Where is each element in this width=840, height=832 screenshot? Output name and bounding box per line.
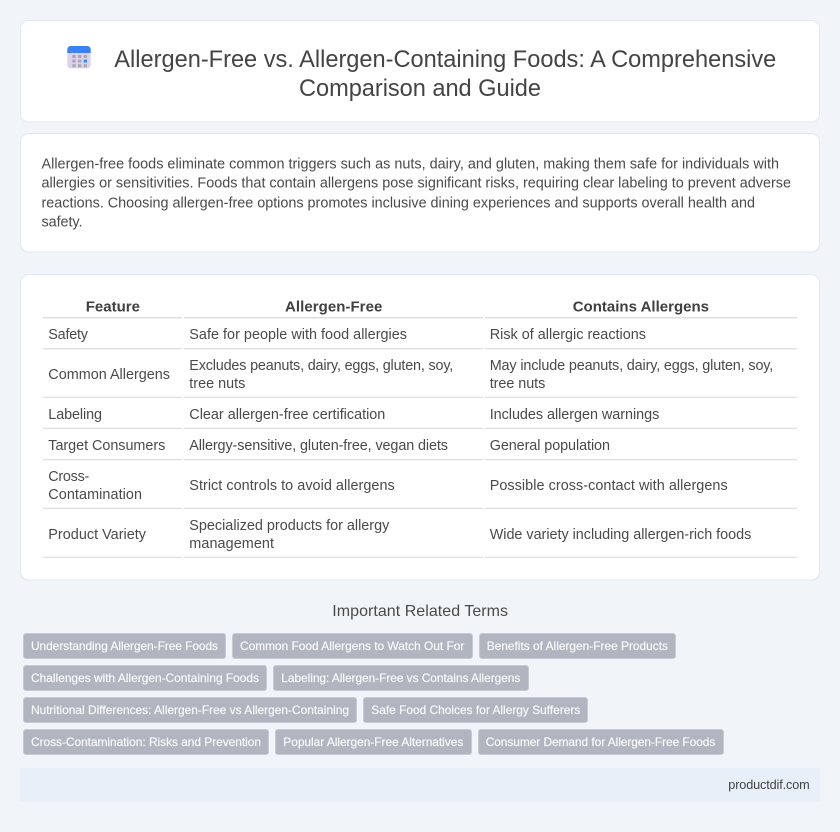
row: labeling [48, 407, 659, 423]
row: product variety: Wide variety including allergen-rich foods [490, 527, 751, 543]
row: safety: Risk of allergic reactions [490, 327, 646, 343]
row: cross-contamination [48, 469, 728, 503]
intro paragraph: Allergen-free foods eliminate common triggers such as nuts, dairy, and gluten, making them safe for individuals with [42, 156, 779, 172]
chip row 4: Cross-Contamination: Risks and Prevention [31, 735, 261, 749]
chip row 1: Understanding Allergen-Free Foods [31, 639, 218, 653]
chip row 3: Safe Food Choices for Allergy Sufferers [371, 703, 580, 717]
chip row 3: Nutritional Differences: Allergen-Free vs Allergen-Containing [31, 703, 349, 717]
row: product variety [48, 518, 751, 552]
chip row 2 [24, 666, 528, 690]
table rules [43, 317, 797, 558]
table header row: Feature [86, 299, 140, 316]
icon: calendar [67, 46, 91, 68]
row: common allergens: tree nuts [189, 376, 245, 392]
row: common allergens: May include peanuts, dairy, eggs, gluten, soy, [490, 358, 773, 374]
row: safety [48, 327, 646, 343]
row: labeling: Labeling [48, 407, 102, 423]
header panel [20, 20, 820, 122]
title [114, 47, 776, 102]
row: common allergens: Common Allergens [48, 367, 170, 383]
heading: important related terms: Important Related Terms [332, 603, 508, 620]
table header row: Contains Allergens [573, 299, 709, 316]
row: product variety: Product Variety [48, 527, 147, 543]
intro paragraph: safety. [42, 215, 82, 231]
chip row 4: Consumer Demand for Allergen-Free Foods [486, 735, 715, 749]
chip row 2: Labeling: Allergen-Free vs Contains Allergens [281, 671, 520, 685]
row: common allergens: tree nuts [490, 376, 545, 392]
row: cross-contamination: Cross- [48, 469, 90, 485]
panel: introduction [20, 134, 820, 252]
row: cross-contamination: Strict controls to avoid allergens [189, 478, 395, 494]
row: common allergens: Excludes peanuts, dairy, eggs, gluten, soy, [189, 358, 453, 374]
row: labeling: Clear allergen-free certification [189, 407, 385, 423]
related terms chips [24, 634, 724, 754]
chip row 1 [24, 634, 676, 658]
footer: productdif.com [728, 778, 810, 792]
intro paragraph: allergies or sensitivities. Foods that contain allergens pose significant risks, requiring clear labeling to prevent adverse [42, 176, 791, 192]
chip row 2: Challenges with Allergen-Containing Foods [31, 671, 259, 685]
chip row 4: Popular Allergen-Free Alternatives [283, 735, 463, 749]
row: target consumers: General population [490, 438, 610, 454]
row: target consumers [48, 438, 610, 454]
chip row 3 [24, 698, 588, 722]
title: Allergen-Free vs. Allergen-Containing Foods: A Comprehensive [114, 47, 776, 73]
row: target consumers: Target Consumers [48, 438, 165, 454]
panel: comparison table [20, 274, 820, 580]
intro paragraph: reactions. Choosing allergen-free options promotes inclusive dining experiences and supports overall health and [42, 195, 755, 211]
row: safety: Safe for people with food allergies [189, 327, 407, 343]
row: product variety: management [189, 536, 274, 552]
table header row [86, 299, 709, 316]
row: cross-contamination: Contamination [48, 487, 142, 503]
row: safety: Safety [48, 327, 89, 343]
row: product variety: Specialized products for allergy [189, 518, 390, 534]
table header row: Allergen-Free [285, 299, 382, 316]
row: common allergens [48, 358, 773, 392]
chip row 1: Common Food Allergens to Watch Out For [240, 639, 464, 653]
title: Comparison and Guide [299, 76, 541, 102]
chip row 4 [24, 730, 724, 754]
row: labeling: Includes allergen warnings [490, 407, 659, 423]
row: target consumers: Allergy-sensitive, gluten-free, vegan diets [189, 438, 448, 454]
footer [20, 768, 820, 802]
intro paragraph [42, 156, 791, 231]
row: cross-contamination: Possible cross-contact with allergens [490, 478, 728, 494]
chip row 1: Benefits of Allergen-Free Products [487, 639, 668, 653]
